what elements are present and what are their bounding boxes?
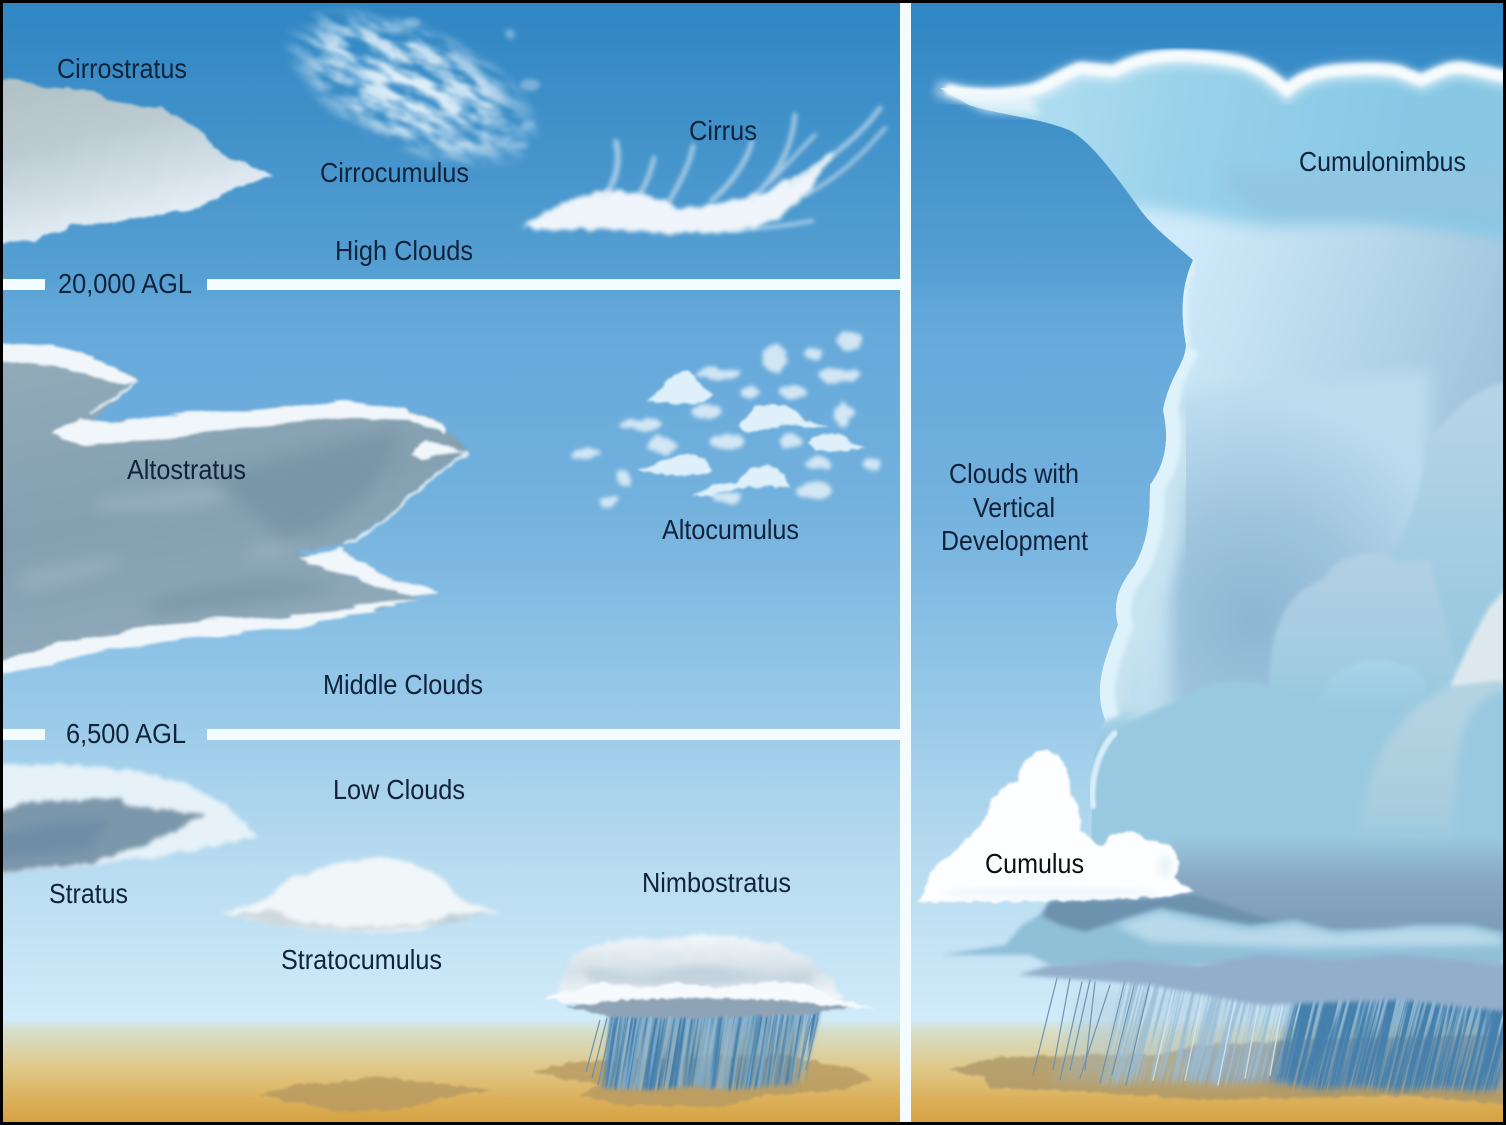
cloud: cirrocumulus xyxy=(257,0,567,205)
labels: low clouds xyxy=(49,774,791,975)
cloud: nimbostratus xyxy=(542,934,876,1018)
labels: middle clouds: Altocumulus xyxy=(662,514,799,545)
cloud: altostratus xyxy=(0,343,468,676)
labels: vertical development: Development xyxy=(941,525,1088,556)
labels: low clouds: Stratus xyxy=(49,878,128,909)
cloud: cumulus xyxy=(918,750,1196,902)
cloud: rain shelf xyxy=(1018,955,1506,1012)
label: 6,500 AGL: 6,500 AGL xyxy=(66,718,186,749)
labels: low clouds: Low Clouds xyxy=(333,774,465,805)
cloud: cumulonimbus xyxy=(930,40,1506,980)
labels: vertical development xyxy=(941,146,1466,879)
labels: high clouds: Cirrocumulus xyxy=(320,157,469,188)
cloud: stratocumulus xyxy=(222,856,500,933)
labels: high clouds: Cirrostratus xyxy=(57,53,187,84)
ground shadows: left panel xyxy=(258,1055,873,1112)
cloud: stratus xyxy=(0,764,258,873)
labels: middle clouds xyxy=(127,454,799,700)
labels: low clouds: Nimbostratus xyxy=(642,867,791,898)
labels: middle clouds: Middle Clouds xyxy=(323,669,483,700)
cloud: cirrostratus xyxy=(0,80,274,243)
cloud: cirrus xyxy=(522,108,885,234)
label: 20,000 AGL: 20,000 AGL xyxy=(58,268,192,299)
rain: cumulonimbus xyxy=(1032,978,1503,1098)
labels: high clouds xyxy=(57,53,757,266)
labels: high clouds: High Clouds xyxy=(335,235,473,266)
divider lines xyxy=(3,3,911,1122)
labels: vertical development: Cumulonimbus xyxy=(1299,146,1466,177)
ground shadow: right panel xyxy=(948,1035,1506,1105)
cloud: altocumulus xyxy=(571,330,882,506)
labels: vertical development: Clouds with xyxy=(949,458,1079,489)
labels: middle clouds: Altostratus xyxy=(127,454,246,485)
labels: low clouds: Stratocumulus xyxy=(281,944,442,975)
rain: nimbostratus xyxy=(585,1010,822,1093)
labels: high clouds: Cirrus xyxy=(689,115,757,146)
labels: vertical development: Vertical xyxy=(973,492,1055,523)
labels: vertical development: Cumulus xyxy=(985,848,1084,879)
